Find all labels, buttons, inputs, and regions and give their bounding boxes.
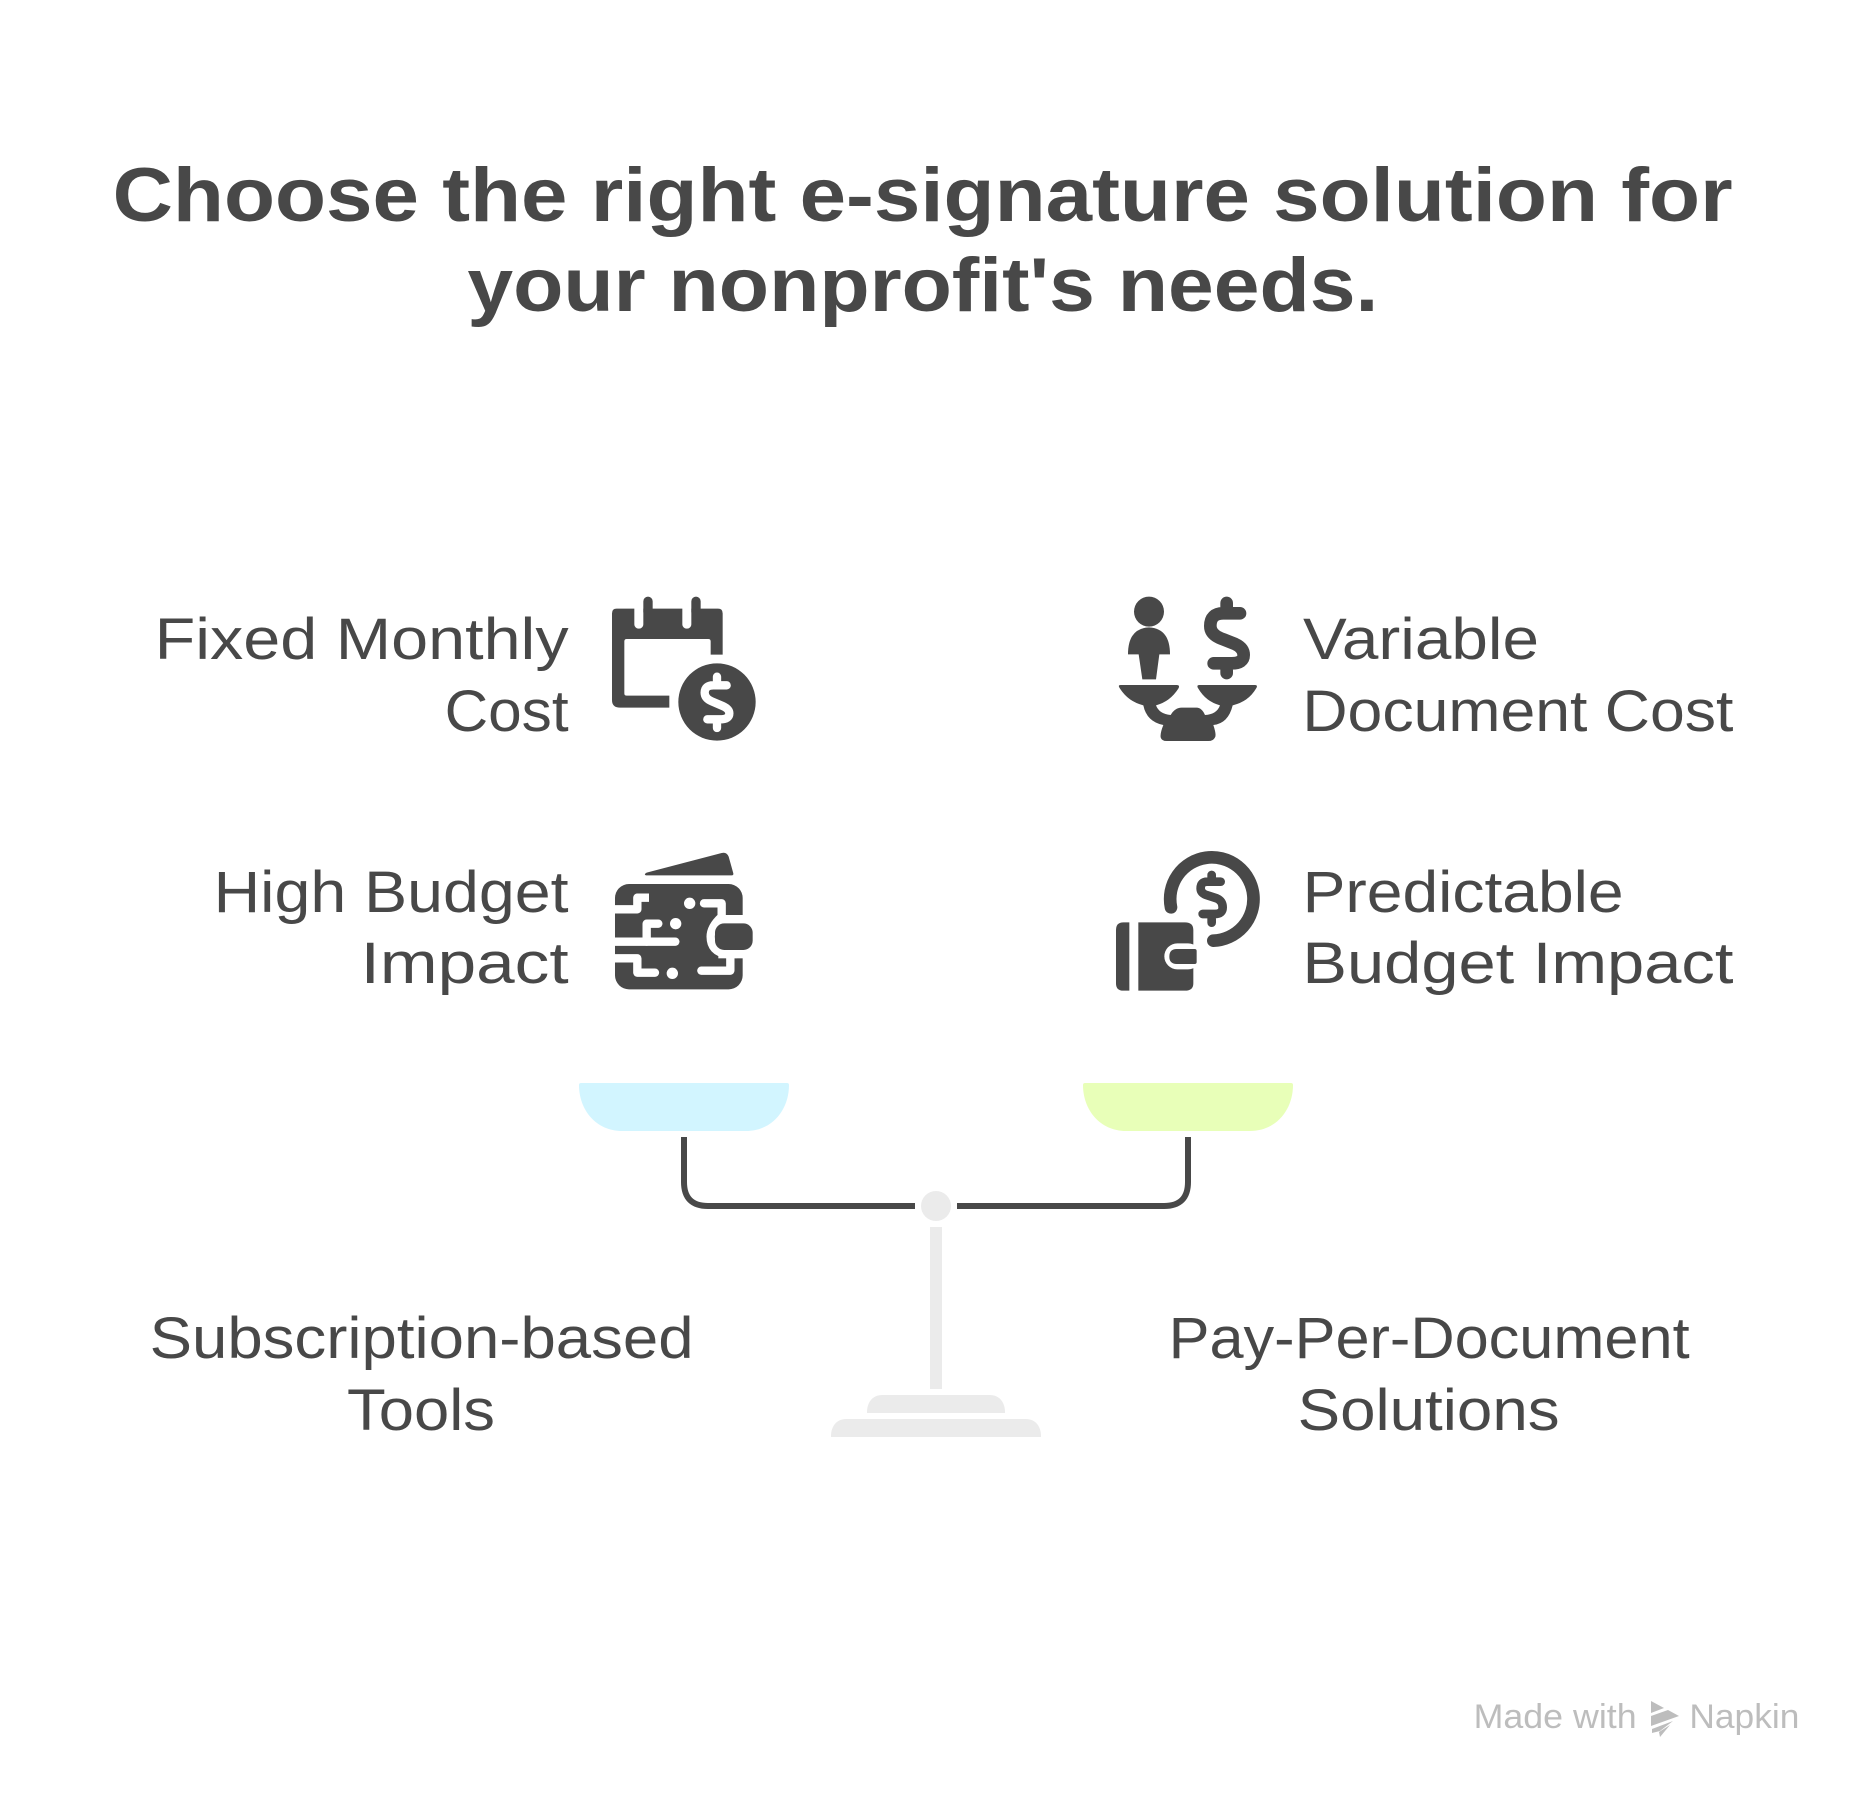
text: high budget impact: High Budget xyxy=(214,860,569,925)
title xyxy=(113,153,1733,328)
text: predictable budget impact: Predictable xyxy=(1303,860,1624,925)
text: variable document cost: Document Cost xyxy=(1302,679,1733,744)
balance scale xyxy=(579,1083,1293,1437)
text: pay-per-document solutions xyxy=(1169,1306,1690,1443)
text: pay-per-document solutions: Solutions xyxy=(1298,1378,1560,1443)
text: fixed monthly cost: Fixed Monthly xyxy=(155,607,569,672)
text: high budget impact xyxy=(214,860,569,996)
icon: wallet with dollar coin xyxy=(1116,857,1253,991)
pivot xyxy=(921,1191,951,1221)
text: variable document cost: Variable xyxy=(1303,607,1539,672)
text: subscription-based tools: Tools xyxy=(347,1378,495,1443)
upper base xyxy=(867,1395,1005,1413)
footer: made with napkin xyxy=(1474,1698,1799,1737)
left beam xyxy=(684,1137,915,1206)
text: pay-per-document solutions: Pay-Per-Document xyxy=(1169,1306,1690,1371)
lower base xyxy=(831,1419,1041,1437)
text: variable document cost xyxy=(1302,607,1733,744)
post xyxy=(930,1227,942,1389)
right pan xyxy=(1083,1083,1293,1131)
icon: person and dollar on scale xyxy=(1119,597,1257,741)
title: your nonprofit's needs. xyxy=(467,243,1378,328)
icon: calendar with dollar coin xyxy=(612,597,756,741)
icon: wallet with cut lines xyxy=(613,853,753,989)
text: fixed monthly cost xyxy=(155,607,569,744)
text: subscription-based tools xyxy=(150,1306,694,1443)
footer: made with napkin: Napkin xyxy=(1689,1698,1799,1736)
icon: napkin logo xyxy=(1651,1701,1679,1737)
footer: made with napkin: Made with xyxy=(1474,1698,1637,1736)
text: predictable budget impact xyxy=(1302,860,1733,996)
text: predictable budget impact: Budget Impact xyxy=(1302,931,1733,996)
text: fixed monthly cost: Cost xyxy=(445,679,569,744)
right beam xyxy=(957,1137,1188,1206)
text: subscription-based tools: Subscription-based xyxy=(150,1306,694,1371)
text: high budget impact: Impact xyxy=(361,931,569,996)
title: Choose the right e-signature solution for xyxy=(113,153,1733,238)
left pan xyxy=(579,1083,789,1131)
